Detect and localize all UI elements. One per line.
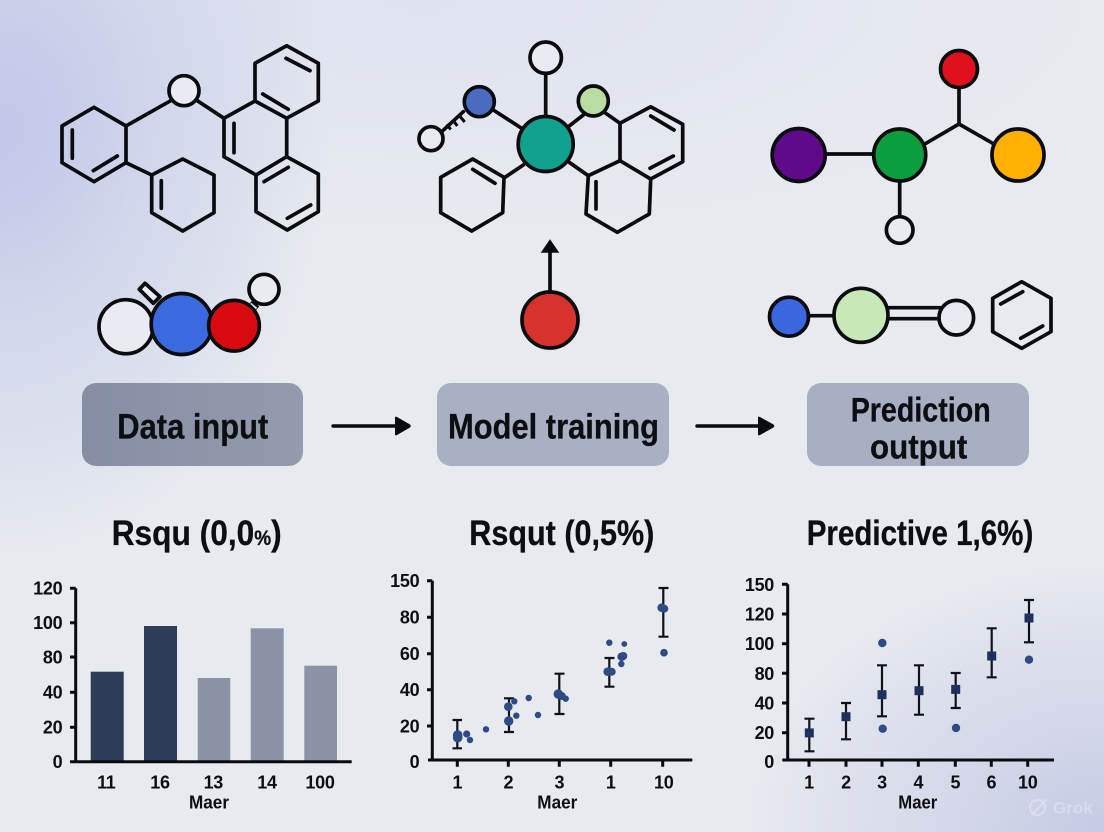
bar chart: left: 11 — [97, 772, 116, 792]
scatter chart: middle: 0 — [410, 752, 420, 772]
scatter chart: middle: 80 — [400, 608, 420, 628]
error bar chart: right: 120 — [745, 604, 774, 624]
error bar chart: right: 6 — [986, 772, 996, 792]
box: model training — [437, 383, 669, 466]
scatter chart: middle: Maer — [537, 792, 577, 812]
scatter chart: middle: 2 — [503, 772, 513, 792]
error bar chart: right: 80 — [755, 664, 774, 684]
error bar chart: right — [745, 575, 1054, 812]
scatter chart: middle: 10 — [654, 772, 674, 792]
scatter chart: middle: 1 — [452, 772, 462, 792]
title: chart 3: Predictive 1,6%) — [807, 514, 1033, 553]
watermark: Grok — [1030, 798, 1093, 818]
molecule: prediction output branched — [772, 50, 1044, 243]
error bar chart: right: 5 — [950, 772, 960, 792]
bar chart: left: 120 — [33, 578, 63, 598]
bar chart: left: 16 — [150, 772, 170, 792]
error bar chart: right: 3 — [877, 772, 887, 792]
scatter chart: middle: 150 — [390, 571, 420, 591]
bar chart: left: 14 — [257, 772, 277, 792]
scatter chart: middle — [390, 571, 692, 812]
scatter chart: middle: 60 — [400, 644, 420, 664]
arrow: model training to prediction output — [697, 417, 774, 435]
icon: benzene ring — [993, 282, 1051, 348]
molecule: prediction output chain — [770, 288, 974, 342]
molecule: data input atoms — [99, 274, 279, 354]
error bar chart: right: 1 — [804, 772, 814, 792]
bar chart: left: 40 — [43, 682, 63, 702]
scatter chart: middle: 40 — [400, 680, 420, 700]
scatter chart: middle: 1 — [606, 772, 616, 792]
error bar chart: right: 2 — [841, 772, 851, 792]
bar chart: left: 100 — [33, 613, 63, 633]
box: prediction output: output — [870, 428, 967, 466]
molecule: model training structure — [419, 42, 683, 232]
bar chart: left: 13 — [204, 772, 223, 792]
bar chart: left — [33, 578, 352, 812]
box: prediction output — [807, 383, 1029, 466]
box: model training: Model training — [448, 407, 659, 446]
scatter chart: middle: 3 — [554, 772, 564, 792]
error bar chart: right: 0 — [764, 752, 774, 772]
error bar chart: right: Maer — [898, 792, 937, 812]
box: data input — [82, 383, 303, 466]
watermark: Grok: Grok — [1053, 798, 1093, 818]
arrow: data input to model training — [333, 417, 411, 435]
arrow: red atom up to model structure — [522, 239, 578, 348]
error bar chart: right: 100 — [745, 634, 774, 654]
box: data input: Data input — [117, 407, 269, 446]
scatter chart: middle: 20 — [400, 716, 420, 736]
bar chart: left: Maer — [189, 792, 229, 812]
title: chart 1: Rsqu (0,0%) — [112, 514, 282, 553]
box: prediction output: Prediction — [851, 392, 991, 430]
error bar chart: right: 150 — [745, 575, 774, 595]
error bar chart: right: 4 — [913, 772, 923, 792]
error bar chart: right: 10 — [1018, 772, 1038, 792]
error bar chart: right: 20 — [755, 723, 774, 743]
title: chart 2: Rsqut (0,5%) — [469, 514, 654, 553]
error bar chart: right: 40 — [755, 694, 774, 714]
bar chart: left: 80 — [43, 648, 63, 668]
bar chart: left: 100 — [305, 772, 335, 792]
bar chart: left: 20 — [43, 718, 63, 738]
molecule: data input structure — [62, 46, 318, 231]
bar chart: left: 0 — [53, 752, 63, 772]
